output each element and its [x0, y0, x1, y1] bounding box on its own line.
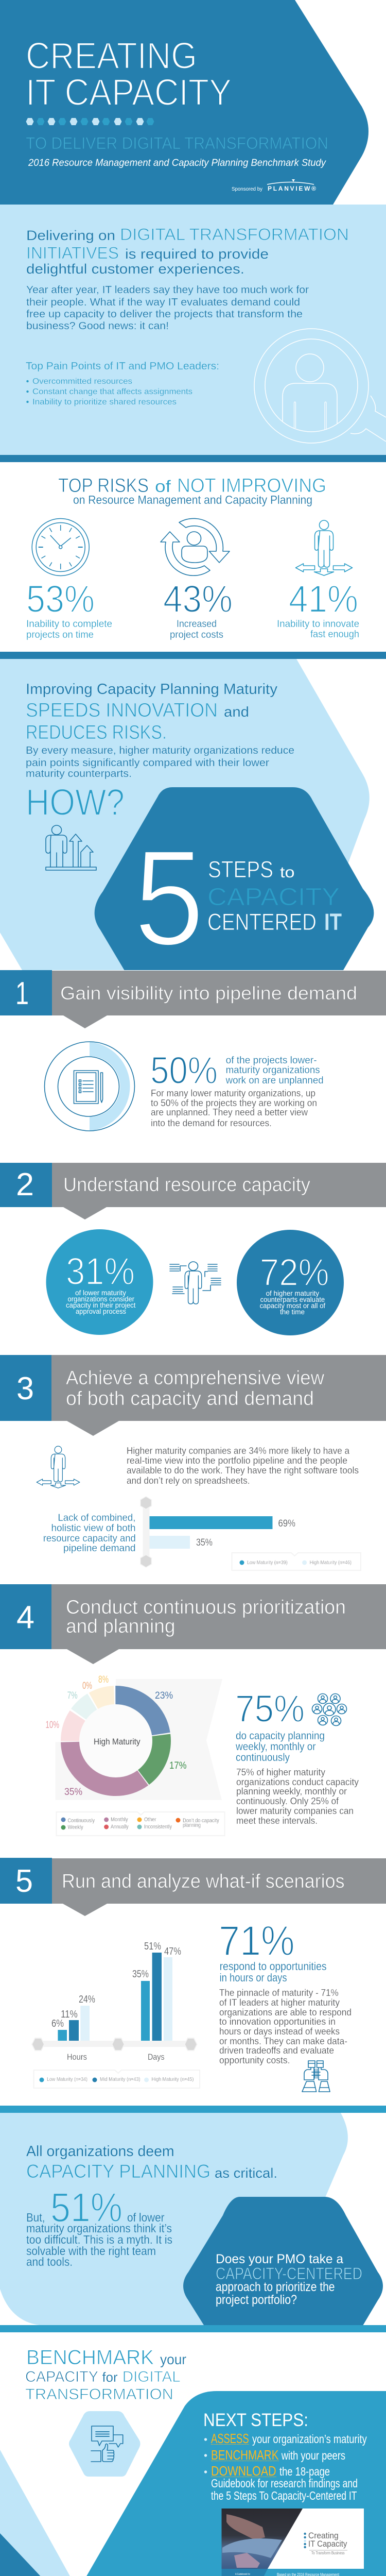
legend: step 4 chart: Weekly: [68, 1824, 83, 1831]
icon: magnifier with person: [254, 329, 386, 443]
maturity paragraph: pain points significantly compared with their lower: [26, 757, 269, 769]
stat: 50%: [150, 1049, 324, 1092]
legend: step 4 chart: [57, 1812, 225, 1836]
bar chart: response time: 47%: [164, 1946, 181, 1957]
step 3 paragraph: and don’t rely on spreadsheets.: [127, 1476, 250, 1486]
stat circle: 31%: of lower maturity: [75, 1289, 126, 1297]
intro heading: delightful customer experiences.: [26, 261, 244, 277]
next steps list: the 18-page: [279, 2465, 330, 2478]
maturity heading: [26, 681, 278, 743]
five steps heading: CENTERED: [207, 909, 317, 935]
panel: five steps hexagon: [95, 787, 374, 970]
stat: 50%: work on are unplanned: [225, 1075, 324, 1086]
chart: high maturity donut: 17%: [169, 1760, 187, 1771]
next steps heading: NEXT STEPS:: [203, 2410, 308, 2430]
step 3 paragraph: Higher maturity companies are 34% more likely to have a: [127, 1446, 350, 1456]
title: [26, 36, 232, 113]
chart: 50% donut with document icon: [44, 1042, 135, 1131]
stat: 53%: 53%: [26, 578, 95, 620]
stat: 51% myth text: [26, 2184, 172, 2268]
intro heading: INITIATIVES: [26, 244, 119, 262]
intro paragraph: [26, 284, 309, 332]
stat: 75%: weekly, monthly or: [235, 1741, 316, 1753]
title: CREATING: [26, 36, 197, 77]
stat: 43%: [163, 578, 233, 640]
stat: 71%: respond to opportunities: [220, 1960, 327, 1973]
risks heading: TOP RISKS: [58, 475, 149, 497]
stat circle: 72%: capacity most or all of: [260, 1302, 325, 1310]
chart: high maturity donut: 0%: [82, 1681, 92, 1691]
stat: 51% myth text: 51%: [50, 2184, 122, 2230]
intro paragraph: Year after year, IT leaders say they have too much work for: [26, 284, 309, 296]
pain points list: Overcommitted resources: [32, 377, 132, 386]
benchmark heading: your: [160, 2351, 186, 2367]
stat: 53%: [26, 578, 112, 640]
chart: high maturity donut: High Maturity: [94, 1737, 141, 1747]
step 4 paragraph: lower maturity companies can: [236, 1805, 354, 1816]
step 3 header: of both capacity and demand: [66, 1388, 314, 1410]
stat: 43%: 43%: [163, 578, 233, 620]
stat circle: 31%: approval process: [76, 1308, 126, 1315]
panel: PMO question hexagon: Does your PMO take a: [216, 2252, 343, 2266]
decoration: bottom left dark wedge: [0, 2533, 103, 2576]
bar chart: lack of holistic view: [43, 1496, 295, 1568]
legend: step 3 chart: Low Maturity (n=39): [247, 1560, 288, 1566]
stat: 50%: 50%: [150, 1049, 218, 1092]
benchmark heading: CAPACITY: [25, 2368, 98, 2385]
step 3 header: [0, 1355, 386, 1436]
step 1 paragraph: to 50% of the projects they are working on: [151, 1098, 317, 1108]
intro heading: is required to provide: [125, 246, 269, 262]
how heading: HOW?: [26, 782, 125, 823]
pain points list: Constant change that affects assignments: [32, 387, 192, 396]
chart: high maturity donut: 8%: [98, 1674, 109, 1685]
subtitle: TO DELIVER DIGITAL TRANSFORMATION: [26, 134, 328, 152]
legend: step 4 chart: Monthly: [111, 1817, 128, 1823]
chart: high maturity donut: 7%: [67, 1690, 78, 1701]
intro heading: Delivering on: [26, 228, 115, 243]
bar chart: response time: 35%: [132, 1969, 149, 1980]
stat: 71%: [219, 1918, 327, 1984]
five steps heading: [134, 822, 342, 974]
step 1 paragraph: are unplanned. They need a better view: [151, 1107, 308, 1117]
stat: 71%: 71%: [219, 1918, 294, 1964]
step 4 header: Conduct continuous prioritization: [66, 1597, 346, 1618]
benchmark heading: TRANSFORMATION: [25, 2386, 173, 2403]
maturity heading: and: [224, 704, 249, 720]
step 1 header: Gain visibility into pipeline demand: [60, 982, 357, 1004]
sponsor logo: [232, 179, 316, 192]
step 5 paragraph: organizations are able to respond: [219, 2007, 352, 2018]
step 1 header: [0, 970, 386, 1028]
guidebook cover: IT Capacity: [308, 2539, 347, 2549]
divider bar: critical bottom: [0, 2325, 386, 2332]
stat circle: 72%: of higher maturity: [266, 1290, 319, 1297]
guidebook cover: [221, 2509, 364, 2576]
benchmark heading: BENCHMARK: [26, 2346, 154, 2369]
sponsor logo: Sponsored by: [232, 187, 262, 192]
stat: 41%: fast enough: [310, 629, 359, 640]
step 4 header: and planning: [66, 1616, 175, 1637]
pain points list: [26, 361, 219, 406]
bar chart: response time: 51%: [144, 1941, 161, 1952]
bar chart: response time: Days: [148, 2052, 165, 2062]
stat: 51% myth text: too difficult. This is a myth. It is: [26, 2233, 172, 2246]
stat: 75%: [235, 1687, 325, 1764]
chart: high maturity donut: 23%: [155, 1690, 173, 1701]
stat circle: 72%: counterparts evaluate: [260, 1296, 325, 1303]
icon: people cluster: [312, 1694, 347, 1726]
legend: step 4 chart: planning: [183, 1822, 201, 1828]
guidebook cover: Creating: [308, 2531, 339, 2540]
five steps heading: STEPS: [208, 856, 273, 883]
stat circle: 72%: the time: [280, 1308, 305, 1316]
stat circle: 72%: [237, 1230, 344, 1335]
stat: 41%: [277, 578, 359, 640]
icon: person with directional arrows: [37, 1446, 80, 1488]
stat: 51% myth text: But,: [26, 2211, 45, 2224]
guidebook cover: To Transform Business: [311, 2551, 345, 2555]
legend: step 5 chart: High Maturity (n=45): [152, 2076, 194, 2082]
step 3 header: Achieve a comprehensive view: [66, 1367, 325, 1389]
icon: hexagon feedback: [69, 2411, 140, 2477]
stat: 53%: Inability to complete: [26, 619, 112, 630]
hexagon dot row: [26, 118, 154, 125]
legend: step 5 chart: Mid Maturity (n=43): [100, 2076, 141, 2082]
stat: 41%: 41%: [289, 578, 358, 620]
step 4 paragraph: planning weekly, monthly or: [236, 1786, 347, 1797]
stat circle: 31%: organizations consider: [68, 1295, 134, 1303]
stat circle: 72%: 72%: [260, 1251, 329, 1294]
section: intro background: [0, 205, 386, 455]
maturity heading: REDUCES RISKS.: [26, 722, 167, 743]
step 5 paragraph: to innovation opportunities in: [219, 2016, 336, 2027]
intro paragraph: their people. What if the way IT evaluates demand could: [26, 297, 300, 308]
bar chart: response time: 11%: [61, 2009, 78, 2020]
panel: header hexagon: [0, 0, 369, 205]
stat: 51% myth text: and tools.: [26, 2255, 73, 2268]
step 5 header: 5: [15, 1863, 33, 1899]
legend: step 5 chart: Low Maturity (n=34): [47, 2076, 87, 2082]
icon: person in circular arrows: [161, 518, 230, 575]
legend: step 4 chart: Other: [144, 1817, 156, 1823]
step 5 paragraph: or months. They can make data-: [219, 2036, 347, 2046]
panel: maturity background: [0, 659, 370, 970]
icon: checklist document: [74, 1071, 103, 1104]
icon: clock: [32, 518, 89, 576]
chart label: resource capacity and: [43, 1533, 136, 1544]
stat: 51% myth text: solvable with the right team: [26, 2244, 156, 2258]
critical heading: [26, 2143, 277, 2182]
benchmark heading: for: [102, 2369, 118, 2385]
step 5 header: [0, 1858, 386, 1916]
chart label: holistic view of both: [51, 1523, 136, 1534]
intro heading: [26, 225, 349, 277]
stat: 71%: in hours or days: [220, 1971, 287, 1984]
step 1 header: 1: [15, 976, 29, 1011]
bar chart: lack of holistic view: 69%: [278, 1518, 295, 1529]
legend: step 4 chart: Annually: [111, 1824, 129, 1830]
stat: 43%: Increased: [177, 619, 217, 630]
stat: 53%: projects on time: [26, 630, 94, 640]
panel: PMO question hexagon: project portfolio?: [216, 2293, 297, 2307]
bar chart: response time: 6%: [51, 2018, 64, 2029]
divider bar: bottom: [0, 652, 386, 659]
panel: PMO question hexagon: [183, 2197, 383, 2325]
bar chart: response time: Hours: [67, 2052, 87, 2062]
risks heading: on Resource Management and Capacity Planning: [73, 493, 312, 506]
step 4 header: [0, 1584, 386, 1664]
step 3 paragraph: available to do the work. They have the right software tools: [127, 1465, 359, 1476]
sponsor logo: PLANVIEW®: [268, 185, 316, 192]
icon: person with task lists: [170, 1262, 221, 1304]
stat: 41%: Inability to innovate: [277, 619, 359, 630]
maturity heading: Improving Capacity Planning Maturity: [26, 681, 278, 698]
step 5 paragraph: hours or days instead of weeks: [219, 2026, 340, 2037]
intro heading: DIGITAL TRANSFORMATION: [120, 225, 349, 244]
chart label: [43, 1513, 136, 1554]
legend: step 4 chart: Inconsistently: [144, 1824, 172, 1830]
critical heading: CAPACITY PLANNING: [26, 2161, 210, 2182]
divider bar: critical top: [0, 2106, 386, 2113]
step 1 paragraph: For many lower maturity organizations, up: [151, 1088, 315, 1098]
next steps list: ASSESS: [211, 2431, 249, 2446]
five steps heading: to: [280, 864, 294, 881]
step 5 paragraph: [219, 1987, 352, 2065]
chart label: pipeline demand: [63, 1543, 136, 1554]
decoration: bottom left light wedge: [0, 2450, 107, 2576]
guidebook cover: A Guidebook for: [235, 2573, 250, 2576]
step 1 paragraph: into the demand for resources.: [151, 1118, 272, 1128]
step 4 header: 4: [16, 1600, 34, 1635]
icon: binoculars: [302, 2061, 330, 2092]
maturity paragraph: [26, 745, 294, 779]
chart: high maturity donut: 35%: [64, 1787, 82, 1798]
stat: 75%: do capacity planning: [236, 1730, 325, 1742]
next steps list: with your peers: [281, 2449, 345, 2462]
benchmark heading: [25, 2346, 186, 2403]
next steps list: DOWNLOAD: [211, 2463, 276, 2479]
step 4 paragraph: meet these intervals.: [236, 1815, 318, 1826]
maturity paragraph: maturity counterparts.: [26, 768, 132, 779]
risks heading: NOT IMPROVING: [177, 475, 326, 497]
step 3 header: 3: [16, 1371, 34, 1406]
intro paragraph: business? Good news: it can!: [26, 320, 169, 332]
step 5 paragraph: of IT leaders at higher maturity: [219, 1997, 340, 2008]
step 5 paragraph: driven tradeoffs and evaluate: [219, 2045, 334, 2056]
chart label: Lack of combined,: [58, 1513, 135, 1523]
stat: 75%: continuously: [236, 1752, 290, 1764]
panel: critical background: [0, 2113, 348, 2325]
risks heading: [58, 475, 326, 506]
title: IT CAPACITY: [26, 72, 232, 113]
step 5 header: Run and analyze what-if scenarios: [62, 1871, 345, 1892]
step 3 paragraph: real-time view into the portfolio pipeline and the people: [127, 1455, 347, 1466]
step 5 paragraph: The pinnacle of maturity - 71%: [219, 1987, 339, 1998]
stat: 50%: maturity organizations: [226, 1065, 320, 1076]
next steps list: BENCHMARK: [211, 2447, 279, 2463]
benchmark heading: DIGITAL: [122, 2368, 181, 2385]
step 3 paragraph: [127, 1446, 359, 1486]
legend: step 5 chart: [34, 2070, 200, 2088]
risks heading: of: [155, 477, 171, 496]
maturity heading: SPEEDS INNOVATION: [26, 700, 218, 721]
panel: PMO question hexagon: approach to prioritize the: [216, 2280, 335, 2294]
chart: high maturity donut: [45, 1674, 222, 1800]
maturity paragraph: By every measure, higher maturity organizations reduce: [26, 745, 294, 756]
intro paragraph: free up capacity to deliver the projects that transform the: [26, 309, 303, 320]
bar chart: response time: 24%: [79, 1994, 95, 2005]
five steps heading: CAPACITY: [207, 884, 340, 911]
step 4 paragraph: [236, 1767, 359, 1826]
step 1 paragraph: [151, 1088, 317, 1128]
stat: 75%: 75%: [235, 1687, 305, 1730]
step 2 header: [0, 1163, 386, 1219]
step 5 paragraph: opportunity costs.: [219, 2055, 290, 2065]
stat circle: 31%: [46, 1229, 153, 1335]
divider bar: top: [0, 455, 386, 462]
legend: step 4 chart: Don’t do capacity: [183, 1818, 219, 1824]
step 4 paragraph: continuously. Only 25% of: [236, 1795, 339, 1806]
stat: 51% myth text: of lower: [127, 2211, 165, 2224]
next steps list: [204, 2431, 367, 2502]
icon: person with rising arrows: [46, 825, 96, 870]
stat: 43%: project costs: [170, 630, 223, 640]
bar chart: response time: [31, 1941, 198, 2062]
critical heading: as critical.: [215, 2165, 277, 2181]
stat circle: 31%: 31%: [66, 1250, 135, 1293]
bar chart: lack of holistic view: 35%: [196, 1537, 213, 1548]
legend: step 3 chart: [232, 1553, 361, 1570]
stat circle: 31%: capacity in their project: [66, 1301, 136, 1309]
panel: next steps: [78, 2391, 386, 2576]
step 4 paragraph: 75% of higher maturity: [236, 1767, 326, 1777]
step 2 header: Understand resource capacity: [63, 1174, 310, 1196]
stat: 50%: of the projects lower-: [226, 1055, 317, 1066]
five steps heading: IT: [324, 909, 342, 935]
icon: person with directional arrows: [295, 520, 352, 575]
step 2 header: 2: [16, 1167, 34, 1202]
critical heading: All organizations deem: [26, 2143, 174, 2160]
legend: step 3 chart: High Maturity (n=46): [310, 1560, 352, 1566]
five steps heading: 5: [134, 822, 204, 974]
chart: high maturity donut: 10%: [45, 1720, 59, 1731]
pain points list: Top Pain Points of IT and PMO Leaders:: [26, 361, 219, 372]
step 4 paragraph: organizations conduct capacity: [236, 1776, 359, 1787]
stat: 51% myth text: maturity organizations think it’s: [26, 2222, 172, 2235]
study name: 2016 Resource Management and Capacity Planning Benchmark Study: [28, 158, 326, 168]
legend: step 4 chart: Continuously: [68, 1818, 95, 1824]
pain points list: Inability to prioritize shared resources: [32, 398, 177, 406]
